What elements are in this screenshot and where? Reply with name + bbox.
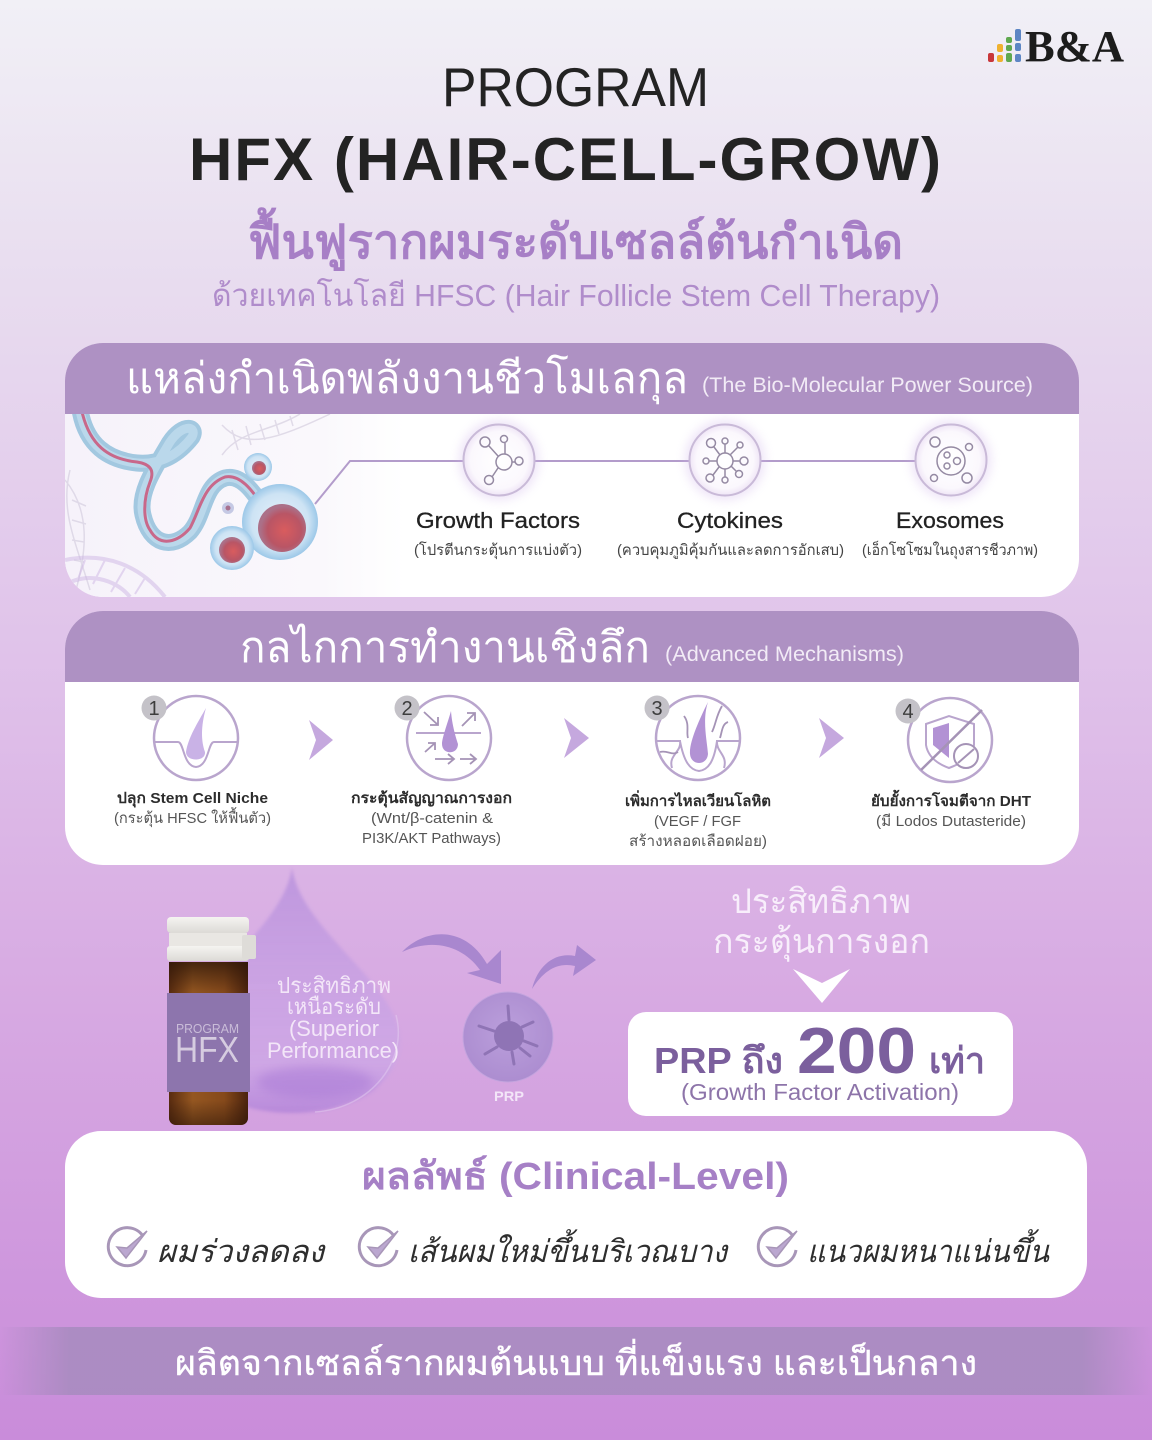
connector line xyxy=(315,461,925,504)
Thai headline: ฟื้นฟูรากผมระดับเซลล์ต้นกำเนิด xyxy=(248,207,903,272)
panel body xyxy=(65,1131,1087,1298)
footer band xyxy=(0,1327,1152,1395)
heading line 1: ประสิทธิภาพ xyxy=(731,883,911,921)
header heading: กลไกการทำงานเชิงลึก xyxy=(240,623,650,672)
step number text: 1 xyxy=(148,698,160,720)
step 4 xyxy=(871,698,1031,830)
icon: blood circulation xyxy=(656,696,740,780)
caption line 1: ประสิทธิภาพ xyxy=(277,973,391,998)
panel header bar xyxy=(65,343,1079,414)
logo wordmark: B&A xyxy=(1025,22,1124,71)
step number text: 4 xyxy=(902,701,914,723)
step description: (กระตุ้น HFSC ให้ฟื้นตัว) xyxy=(114,807,271,828)
item: Exosomes xyxy=(862,420,1038,560)
callout sub text: (Growth Factor Activation) xyxy=(681,1079,959,1105)
icon: check xyxy=(108,1228,147,1266)
step description line 1: (VEGF / FGF xyxy=(654,813,741,830)
step 3 xyxy=(625,696,771,850)
panel: advanced mechanisms xyxy=(65,611,1079,865)
subtitle xyxy=(212,207,940,313)
vial glass xyxy=(169,962,248,1125)
step number xyxy=(394,696,420,720)
spiky cell xyxy=(479,1006,537,1064)
description: (ควบคุมภูมิคุ้มกันและลดการอักเสบ) xyxy=(617,542,844,560)
callout: PRP 200x xyxy=(628,1012,1013,1116)
step number xyxy=(142,696,166,720)
icon: DHT shield xyxy=(908,698,992,782)
efficacy heading xyxy=(713,883,930,962)
icon: signal pathways xyxy=(407,696,491,780)
caption line 2: เหนือระดับ xyxy=(287,994,381,1019)
band background xyxy=(0,1327,1152,1395)
title line 1: PROGRAM xyxy=(442,56,709,118)
step description line 1: (Wnt/β-catenin & xyxy=(371,810,493,827)
step number xyxy=(644,696,670,720)
step number text: 2 xyxy=(401,698,413,720)
step title: เพิ่มการไหลเวียนโลหิต xyxy=(625,790,771,810)
product vial xyxy=(167,917,256,1125)
step 1 xyxy=(114,696,271,828)
panel header bar xyxy=(65,611,1079,682)
result text: เส้นผมใหม่ขึ้นบริเวณบาง xyxy=(408,1229,729,1269)
times text: เท่า xyxy=(929,1040,985,1081)
icon: growth factors xyxy=(459,420,539,500)
result 1 xyxy=(108,1228,326,1269)
PRP text: PRP ถึง xyxy=(654,1040,783,1081)
label PROGRAM: PROGRAM xyxy=(176,1022,239,1036)
result 3 xyxy=(758,1228,1050,1269)
PRP cell xyxy=(463,992,553,1104)
result text: ผมร่วงลดลง xyxy=(157,1234,326,1269)
step description line 2: สร้างหลอดเลือดฝอย) xyxy=(629,833,767,850)
vial cap xyxy=(167,917,256,961)
step title: ยับยั้งการโจมตีจาก DHT xyxy=(871,789,1031,810)
icon: check xyxy=(359,1228,398,1266)
callout card xyxy=(628,1012,1013,1116)
heading line 2: กระตุ้นการงอก xyxy=(713,923,930,962)
icon: signal bars xyxy=(988,29,1021,62)
icon: exosomes xyxy=(911,420,991,500)
item: Growth Factors xyxy=(414,420,582,560)
description: (เอ็กโซโซมในถุงสารชีวภาพ) xyxy=(862,540,1038,560)
step description: (มี Lodos Dutasteride) xyxy=(876,813,1026,830)
step title: ปลุก Stem Cell Niche xyxy=(117,790,268,808)
arrow xyxy=(819,718,844,758)
icon: check xyxy=(758,1228,797,1266)
PRP label: PRP xyxy=(494,1088,524,1104)
step number xyxy=(896,698,920,724)
panel: clinical results xyxy=(65,1131,1087,1298)
caption line 3: (Superior xyxy=(289,1016,379,1041)
step 2 xyxy=(351,696,512,847)
logo: B&A xyxy=(988,22,1124,71)
title line 2: HFX (HAIR-CELL-GROW) xyxy=(189,126,941,193)
number 200: 200 xyxy=(797,1014,916,1087)
arrow xyxy=(564,718,589,758)
technology line: ด้วยเทคโนโลยี HFSC (Hair Follicle Stem Cell Therapy) xyxy=(212,278,940,313)
step title: กระตุ้นสัญญาณการงอก xyxy=(351,790,512,808)
icon: hair follicle xyxy=(154,696,238,780)
arrow xyxy=(309,720,333,760)
caption line 4: Performance) xyxy=(267,1038,399,1063)
title xyxy=(189,56,941,193)
vial label xyxy=(167,993,250,1092)
panel: bio-molecular power source xyxy=(65,343,1079,597)
result 2 xyxy=(359,1228,729,1269)
sphere xyxy=(463,992,553,1082)
label: Cytokines xyxy=(677,508,783,533)
panel body xyxy=(65,611,1079,865)
vial glass shading xyxy=(169,962,248,1125)
step number text: 3 xyxy=(651,698,663,720)
arrow: down chevron xyxy=(793,969,850,1003)
illustration: stem cells and follicle xyxy=(65,414,330,597)
header heading: แหล่งกำเนิดพลังงานชีวโมเลกุล xyxy=(126,354,688,405)
description: (โปรตีนกระตุ้นการแบ่งตัว) xyxy=(414,541,582,560)
header English: (Advanced Mechanisms) xyxy=(665,643,904,666)
results heading: ผลลัพธ์ (Clinical-Level) xyxy=(362,1155,789,1198)
result text: แนวผมหนาแน่นขึ้น xyxy=(807,1229,1050,1269)
arrow: out of PRP xyxy=(532,945,596,989)
panel body xyxy=(65,343,1079,597)
label: Growth Factors xyxy=(416,508,580,533)
step description line 2: PI3K/AKT Pathways) xyxy=(362,830,501,847)
arrow: into PRP xyxy=(402,934,501,984)
header English: (The Bio-Molecular Power Source) xyxy=(702,374,1033,397)
drop caption xyxy=(267,973,399,1063)
icon: cytokines xyxy=(685,420,765,500)
illustration: serum drop xyxy=(185,867,400,1113)
footer text: ผลิตจากเซลล์รากผมต้นแบบ ที่แข็งแรง และเป็นกลาง xyxy=(175,1339,977,1383)
item: Cytokines xyxy=(617,420,844,560)
label HFX: HFX xyxy=(175,1029,239,1070)
label: Exosomes xyxy=(896,508,1004,533)
